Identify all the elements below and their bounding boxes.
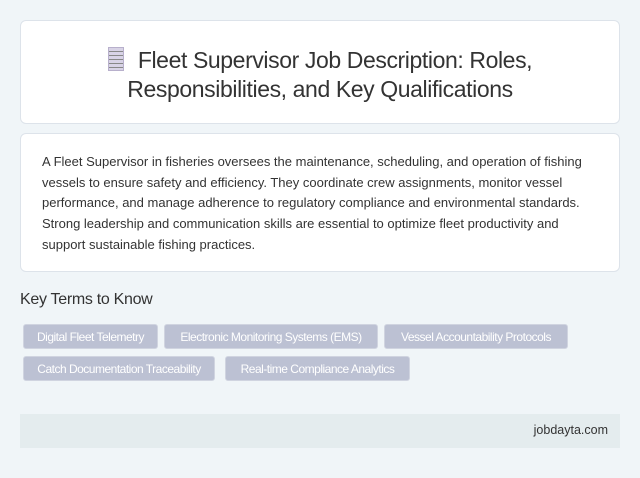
description panel [20, 133, 620, 272]
icon: document [108, 47, 124, 71]
footer [20, 414, 620, 448]
tag [23, 356, 215, 381]
tag: Electronic Monitoring Systems (EMS) [180, 330, 362, 344]
title: Fleet Supervisor Job Description: Roles, [138, 47, 532, 73]
description text: A Fleet Supervisor in fisheries oversees the maintenance, scheduling, and operation of fishing vessels to ensure safety and efficiency. They coordinate crew assignments, monitor vessel performance, and manage adherence to regulatory compliance and environmental standards. Strong leadership and communication skills are essential to optimize fleet productivity and support sustainable fishing practices. [42, 154, 582, 252]
tag: Vessel Accountability Protocols [401, 330, 551, 344]
tag [23, 324, 158, 349]
heading: key terms: Key Terms to Know [20, 291, 152, 308]
footer text: jobdayta.com [534, 423, 608, 437]
tag [164, 324, 378, 349]
tag [384, 324, 568, 349]
title [108, 47, 532, 102]
tag [225, 356, 410, 381]
tag: Catch Documentation Traceability [37, 362, 201, 376]
title panel [20, 20, 620, 124]
tag: Real-time Compliance Analytics [241, 362, 394, 376]
tag: Digital Fleet Telemetry [37, 330, 144, 344]
title: Responsibilities, and Key Qualifications [127, 76, 513, 102]
